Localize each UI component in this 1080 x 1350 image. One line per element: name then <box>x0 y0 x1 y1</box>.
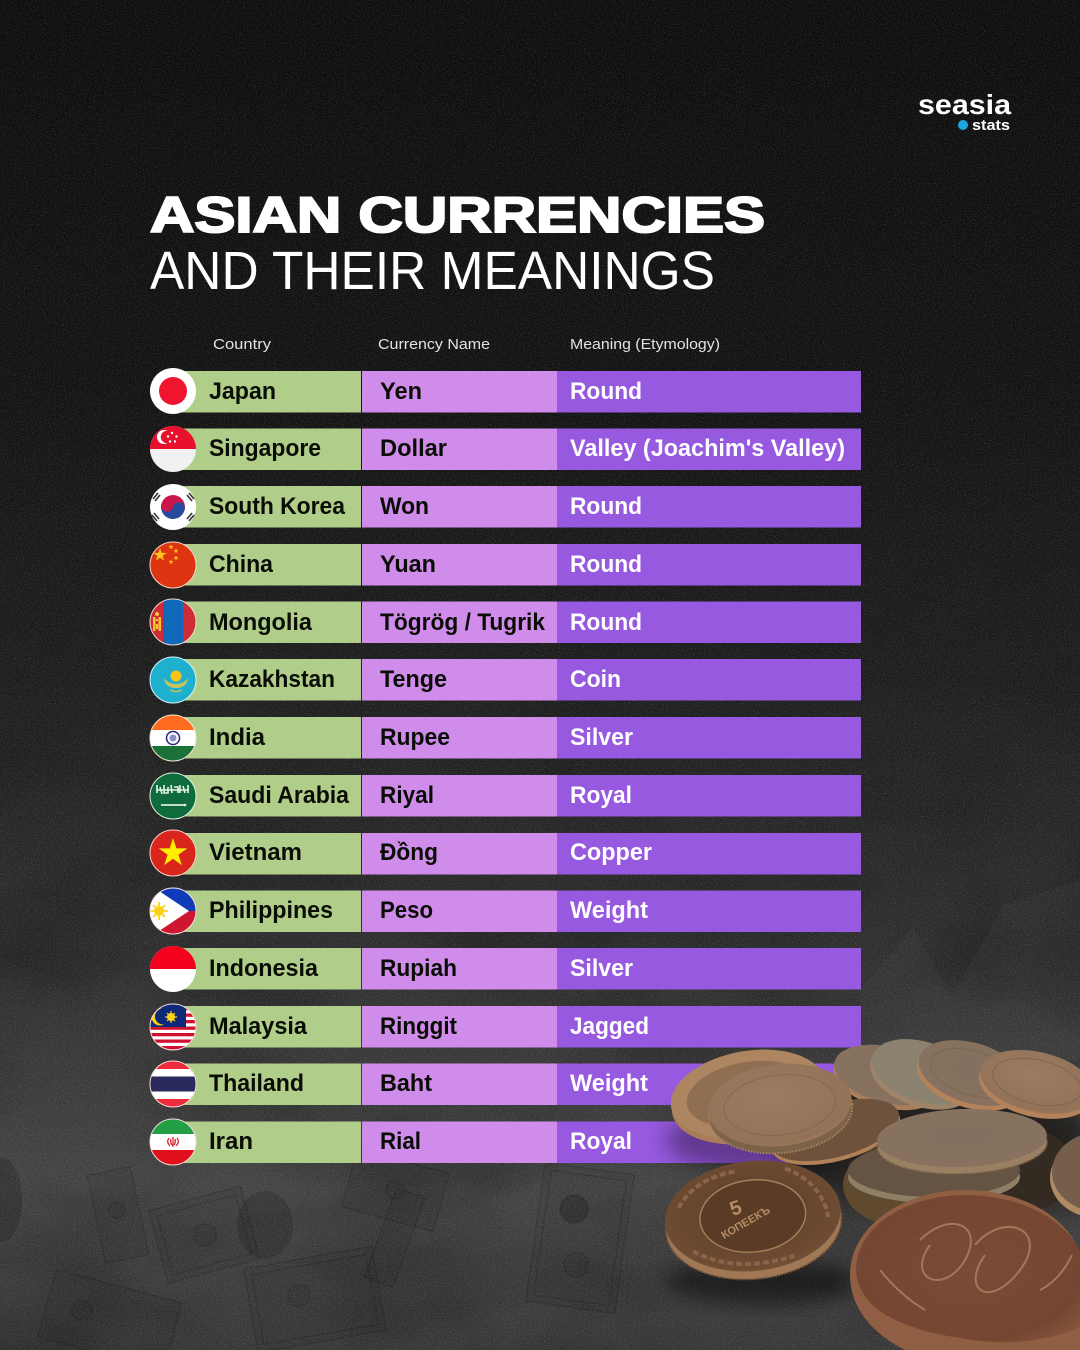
row: Singapore: Singapore <box>209 435 321 462</box>
row: Singapore: Valley (Joachim's Valley) <box>570 435 845 462</box>
row: India <box>150 715 861 761</box>
table header: Currency Name <box>378 336 490 353</box>
row: Kazakhstan: Coin <box>570 666 621 693</box>
coin pile <box>660 1027 1080 1350</box>
row: Indonesia: Silver <box>570 955 633 982</box>
row: Thailand <box>150 1061 835 1107</box>
row: Indonesia: Rupiah <box>380 955 457 982</box>
row: Japan: Japan <box>209 378 276 405</box>
flag: South Korea <box>150 484 196 530</box>
flag: Malaysia <box>150 1004 196 1050</box>
logo: seasia stats <box>918 89 1011 134</box>
coin: back row four <box>973 1040 1080 1129</box>
row: Mongolia <box>150 599 861 645</box>
flag: Iran <box>150 1119 196 1165</box>
table header <box>213 336 720 353</box>
row: Kazakhstan: Kazakhstan <box>209 666 335 693</box>
row: Thailand: Baht <box>380 1070 432 1097</box>
row: South Korea: South Korea <box>209 493 346 520</box>
row: Mongolia: Tögrög / Tugrik <box>380 609 546 636</box>
row: Malaysia: Jagged <box>570 1013 649 1040</box>
row: China: China <box>209 551 274 578</box>
flag: Indonesia <box>150 946 196 992</box>
coin: middle lower <box>848 1143 1020 1203</box>
flag: Mongolia <box>150 599 196 645</box>
row: Saudi Arabia <box>150 773 861 819</box>
flag: Japan <box>150 368 196 414</box>
row: Kazakhstan: Tenge <box>380 666 447 693</box>
row: Malaysia: Ringgit <box>380 1013 457 1040</box>
row: Indonesia <box>150 946 861 992</box>
title <box>150 187 765 301</box>
row: Iran: Royal <box>570 1128 632 1155</box>
row: Iran: Rial <box>380 1128 421 1155</box>
row: Vietnam: Copper <box>570 839 652 866</box>
row: India: India <box>209 724 266 751</box>
coin: five kopeks: КОПЕЕКЪ <box>720 1204 773 1242</box>
coin: far right <box>1050 1132 1080 1218</box>
row: Saudi Arabia: Royal <box>570 782 632 809</box>
row: Mongolia: Round <box>570 609 642 636</box>
row: Vietnam: Vietnam <box>209 839 302 866</box>
coin: back row one <box>827 1035 948 1120</box>
row: South Korea <box>150 484 861 530</box>
row: Japan: Round <box>570 378 642 405</box>
row: Philippines: Peso <box>380 897 433 924</box>
row: Thailand: Weight <box>570 1070 648 1097</box>
row: India: Silver <box>570 724 633 751</box>
row: South Korea: Won <box>380 493 429 520</box>
row: Iran: Iran <box>209 1128 253 1155</box>
logo: seasia stats: seasia <box>918 89 1011 120</box>
row: China: Round <box>570 551 642 578</box>
flag: Saudi Arabia <box>150 773 196 819</box>
row: Indonesia: Indonesia <box>209 955 319 982</box>
flag: Kazakhstan <box>150 657 196 703</box>
coin: five kopeks: 5 <box>727 1196 745 1221</box>
row: Japan: Yen <box>380 378 422 405</box>
row: Singapore <box>150 426 861 472</box>
table header: Meaning (Etymology) <box>570 336 720 353</box>
row: South Korea: Round <box>570 493 642 520</box>
row: China <box>150 542 861 588</box>
coin: large foreground <box>850 1190 1080 1350</box>
logo: seasia stats: stats <box>972 117 1010 134</box>
row: Japan <box>150 368 861 414</box>
row: Singapore: Dollar <box>380 435 447 462</box>
row: Philippines <box>150 885 861 937</box>
row: Saudi Arabia: Riyal <box>380 782 434 809</box>
coin: right dark <box>985 1130 1075 1210</box>
flag: Thailand <box>150 1061 196 1107</box>
coin: middle upper <box>876 1106 1048 1177</box>
flag: China <box>150 542 196 588</box>
row: India: Rupee <box>380 724 450 751</box>
coin: back row two <box>862 1027 983 1122</box>
row: Malaysia <box>150 1004 861 1050</box>
flag: Vietnam <box>150 830 196 876</box>
row: Thailand: Thailand <box>209 1070 304 1097</box>
title: AND THEIR MEANINGS <box>150 241 715 301</box>
row: China: Yuan <box>380 551 436 578</box>
row: Philippines: Weight <box>570 897 648 924</box>
row: Malaysia: Malaysia <box>209 1013 308 1040</box>
row: Philippines: Philippines <box>209 897 333 924</box>
row: Vietnam: Đồng <box>380 839 438 866</box>
table header: Country <box>213 336 272 353</box>
flag: Philippines <box>150 885 196 937</box>
coin: behind left stack <box>764 1087 907 1177</box>
title: ASIAN CURRENCIES <box>150 187 765 243</box>
coin: back row three <box>909 1028 1033 1123</box>
flag: Singapore <box>150 426 196 472</box>
coin: dark under middle <box>843 1143 967 1227</box>
coin: stack left back <box>664 1038 833 1156</box>
coin: five kopeks <box>660 1152 847 1288</box>
row: Vietnam <box>150 830 861 876</box>
row: Mongolia: Mongolia <box>209 609 313 636</box>
row: Saudi Arabia: Saudi Arabia <box>209 782 350 809</box>
coin: stack left front <box>704 1057 857 1160</box>
flag: India <box>150 715 196 761</box>
row: Kazakhstan <box>150 657 861 703</box>
row: Iran <box>150 1119 835 1165</box>
